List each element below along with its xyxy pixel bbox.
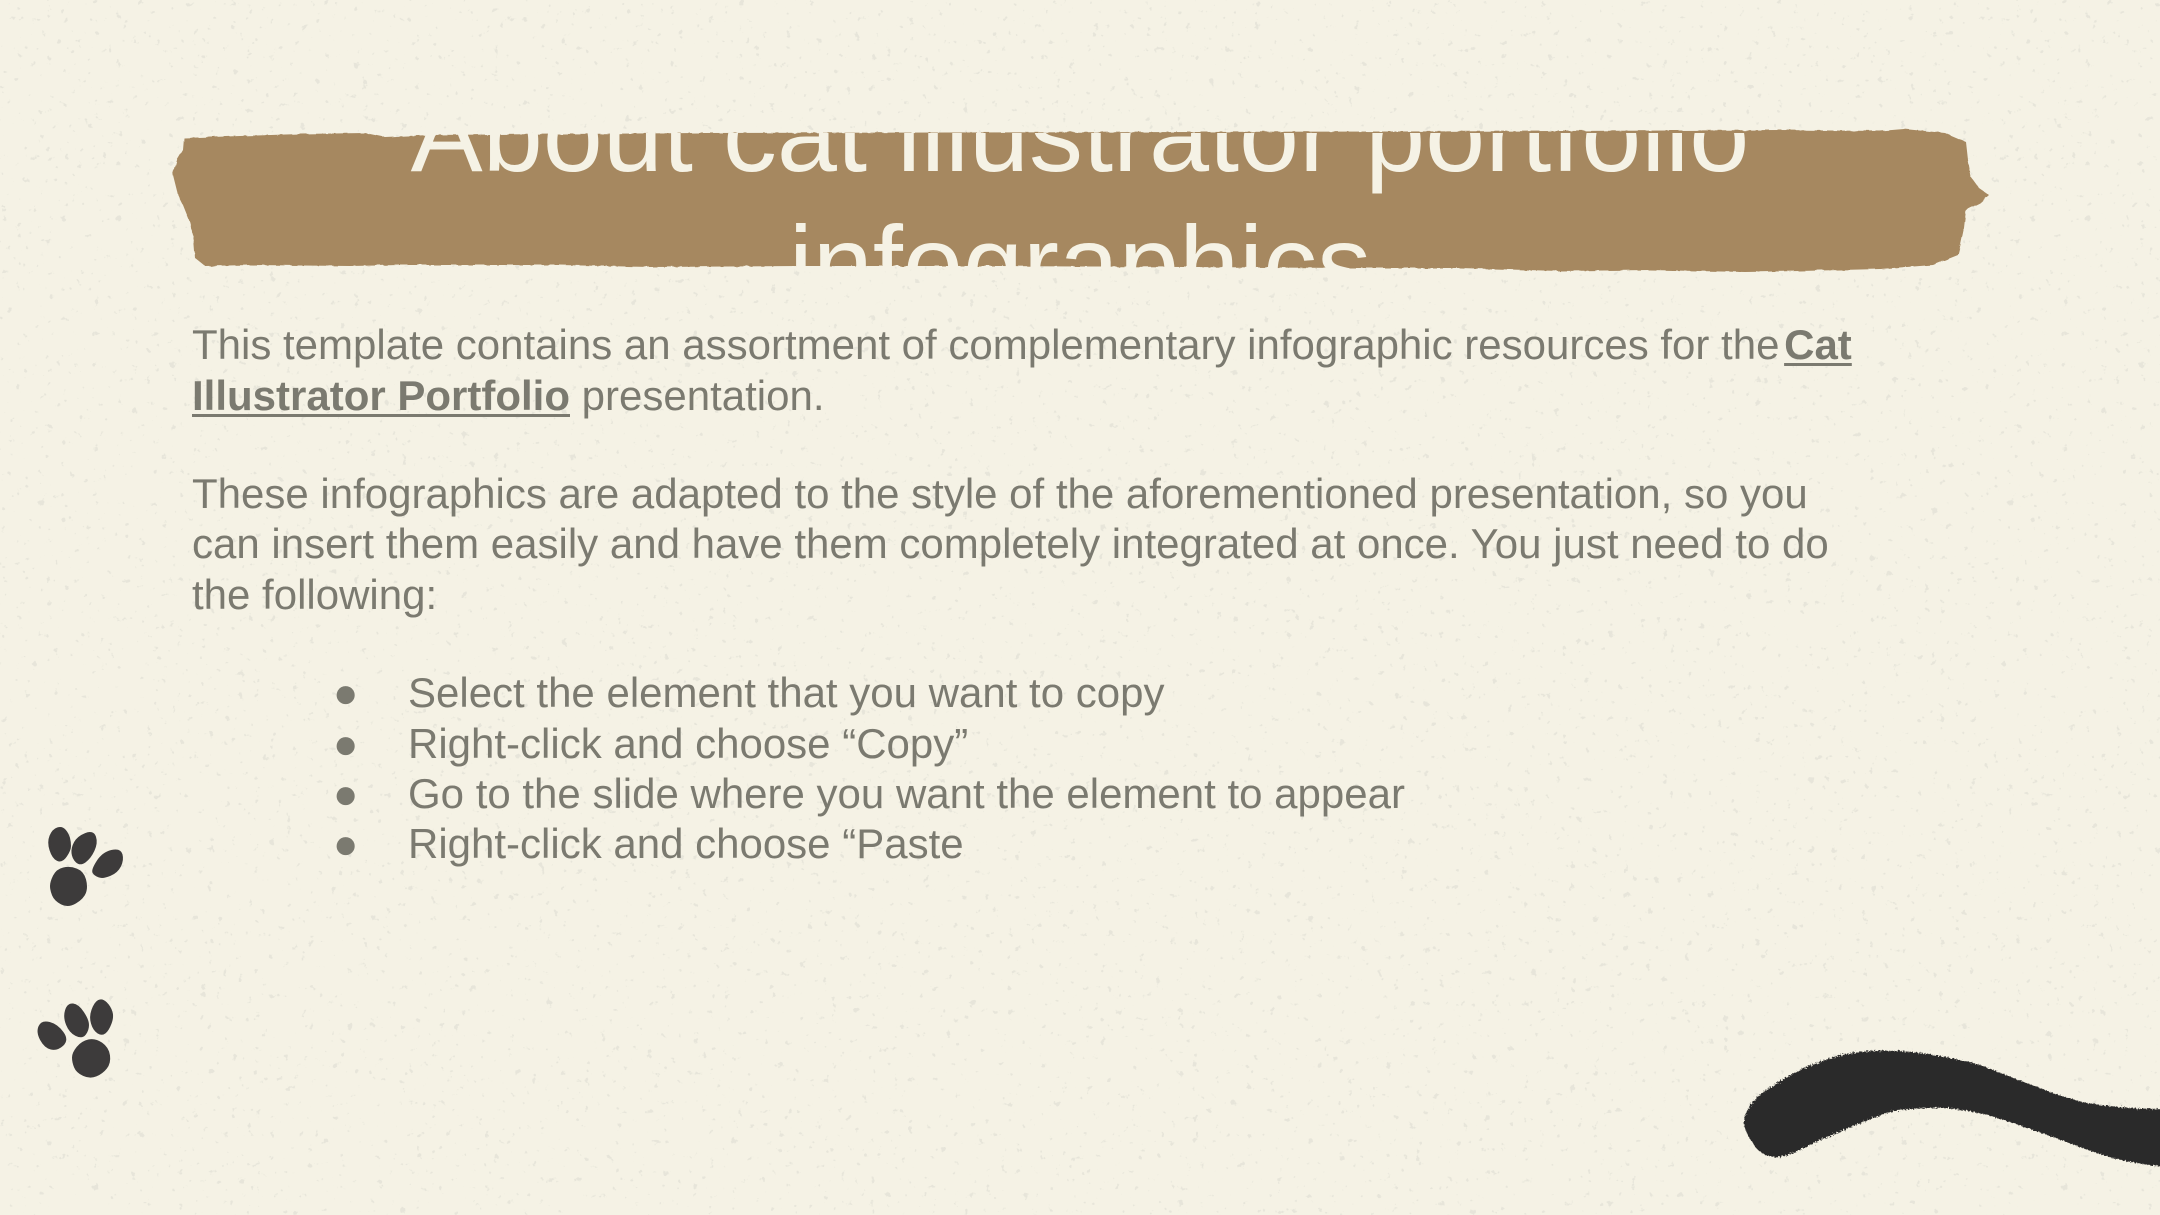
icon: upper paw print [49,828,122,905]
bullet list: Right-click and choose “Copy” [408,720,968,767]
icon: lower paw print [39,1000,112,1077]
cat tail brush stroke [1744,1051,2160,1168]
instructions paragraph: These infographics are adapted to the style of the aforementioned presentation, so you [192,470,1808,517]
title [410,133,1749,269]
bullet list: Select the element that you want to copy [408,669,1164,716]
bullet list: ● [333,720,358,767]
bullet list: ● [333,770,358,817]
intro paragraph [192,321,1852,419]
instructions paragraph: the following: [192,571,437,618]
bullet list: Right-click and choose “Paste [408,820,964,867]
bullet list: ● [333,820,358,867]
bullet list: Go to the slide where you want the element to appear [408,770,1405,817]
instructions paragraph [192,470,1829,618]
bullet list: ● [333,669,358,716]
bullet list [333,669,1405,867]
intro paragraph: Illustrator Portfolio presentation. [192,372,825,419]
intro paragraph: This template contains an assortment of complementary infographic resources for the Cat [192,321,1852,368]
instructions paragraph: can insert them easily and have them completely integrated at once. You just need to do [192,520,1829,567]
